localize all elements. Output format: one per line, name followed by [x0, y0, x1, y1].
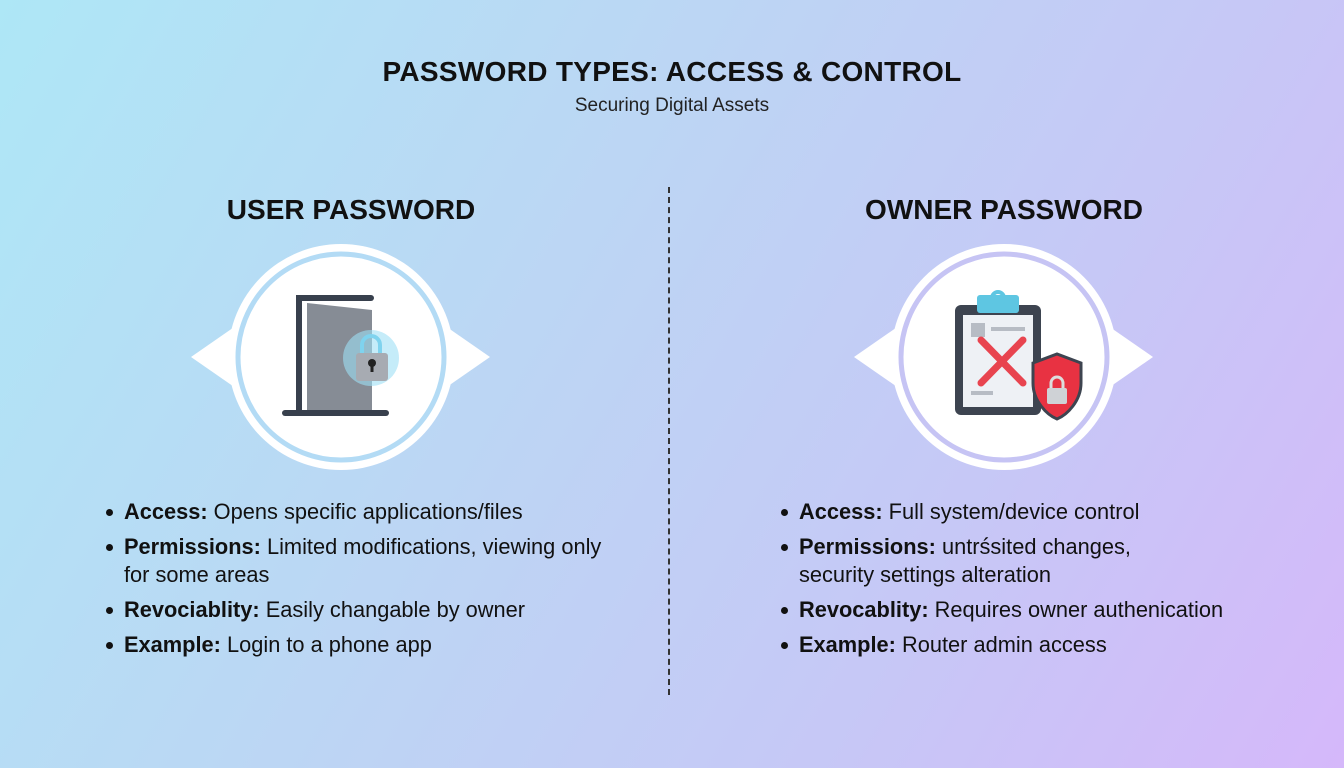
heading: owner password: OWNER PASSWORD — [865, 194, 1143, 225]
divider — [668, 187, 670, 695]
list: owner password: Example: Router admin access — [799, 632, 1107, 657]
list: user password: Access: Opens specific applications/files — [124, 499, 523, 524]
icon: owner clipboard badge — [854, 244, 1153, 470]
list: user password: Revociablity: Easily changable by owner — [124, 597, 525, 622]
title: PASSWORD TYPES: ACCESS & CONTROL — [383, 56, 961, 87]
list: owner password: Permissions: untrśsited changes, — [799, 534, 1131, 559]
list: user password: Example: Login to a phone app — [124, 632, 432, 657]
icon: user door badge — [191, 244, 490, 470]
list: user password: Permissions: Limited modifications, viewing only — [124, 534, 601, 559]
list: user password — [106, 499, 602, 657]
heading: user password: USER PASSWORD — [227, 194, 475, 225]
list: owner password: Revocablity: Requires owner authenication — [799, 597, 1223, 622]
subtitle: Securing Digital Assets — [575, 95, 769, 116]
list: owner password — [781, 499, 1223, 657]
list: owner password: Access: Full system/device control — [799, 499, 1139, 524]
list: owner password: security settings alteration — [799, 562, 1051, 587]
list: user password: for some areas — [124, 562, 269, 587]
